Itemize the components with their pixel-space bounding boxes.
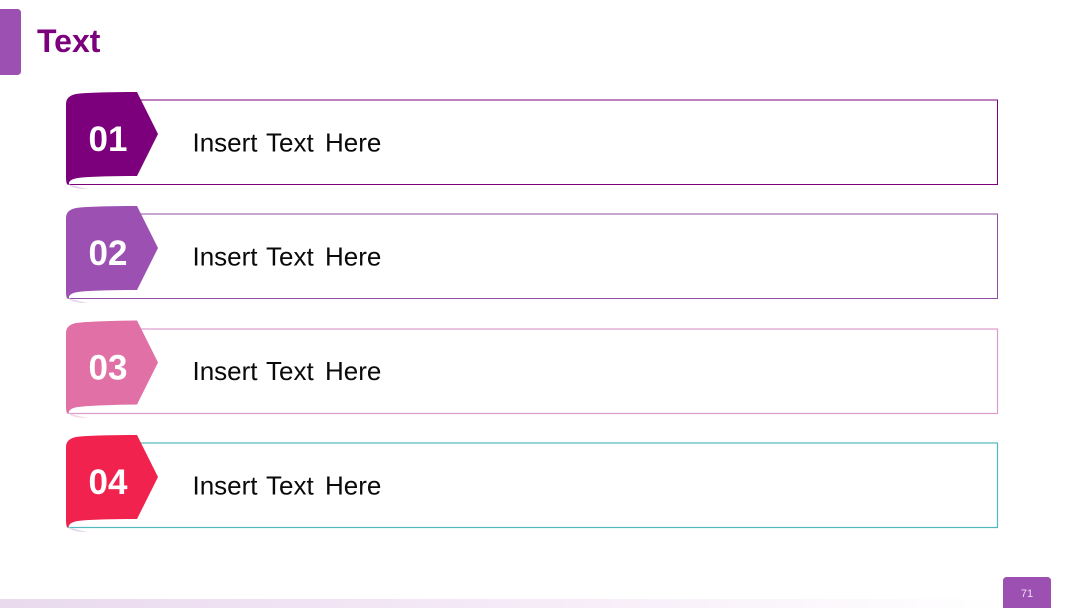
row 2 number: 02 xyxy=(89,234,127,273)
row 2 curl xyxy=(68,298,88,303)
row 1 curl xyxy=(68,184,88,189)
footer gradient band xyxy=(0,599,1003,608)
row 4 box xyxy=(68,443,998,528)
row 1 text: Here xyxy=(325,128,381,158)
row 3 text: Text xyxy=(266,356,314,386)
row 4 curl xyxy=(68,527,88,532)
row 1 text: Text xyxy=(266,128,314,158)
row 2 xyxy=(66,206,998,303)
row 2 text: Insert xyxy=(192,242,258,272)
page number: 71 xyxy=(1021,588,1033,600)
row 4 text: Here xyxy=(325,470,381,500)
row 1 badge xyxy=(66,92,158,185)
row 1 text: Insert xyxy=(192,128,258,158)
row 4 badge xyxy=(66,435,158,528)
row 3 text: Here xyxy=(325,356,381,386)
row 2 box xyxy=(68,214,998,298)
row 2 text: Here xyxy=(325,242,381,272)
row 3 xyxy=(66,320,998,418)
title accent tab xyxy=(0,9,21,75)
row 1 xyxy=(66,92,998,189)
row 3 number: 03 xyxy=(89,348,127,388)
row 4 number: 04 xyxy=(89,463,128,502)
row 3 badge xyxy=(66,320,158,414)
row 1 box xyxy=(68,100,998,184)
row 1 number: 01 xyxy=(89,120,127,159)
row 3 box xyxy=(68,329,998,414)
row 4 xyxy=(66,435,998,532)
row 3 text: Insert xyxy=(192,356,258,386)
row 4 text: Text xyxy=(266,470,314,500)
page number tab xyxy=(1003,577,1051,608)
row 2 text: Text xyxy=(266,242,314,272)
row 2 badge xyxy=(66,206,158,299)
title: Text xyxy=(37,23,101,59)
row 3 curl xyxy=(68,413,88,418)
row 4 text: Insert xyxy=(192,470,258,500)
